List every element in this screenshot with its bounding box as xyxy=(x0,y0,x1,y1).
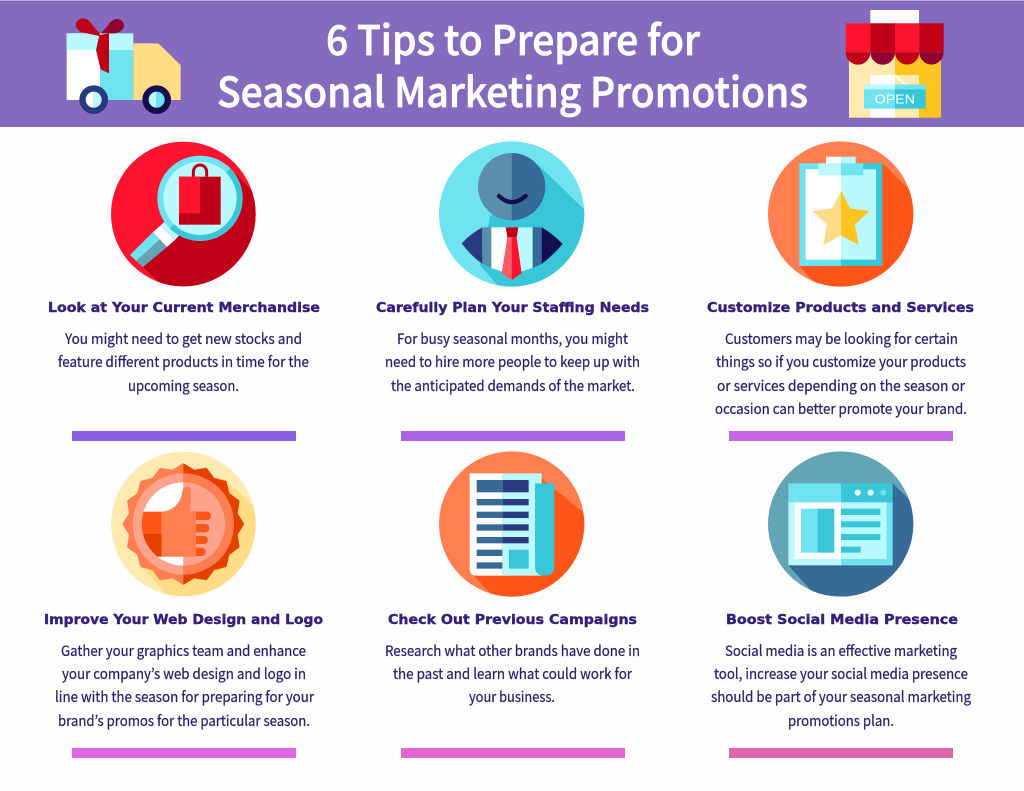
title: 6 Tips to Prepare for xyxy=(326,7,700,67)
text block: the past and learn what could work for xyxy=(393,663,632,684)
heading: Customize Products and Services xyxy=(707,300,974,316)
icon: magnifying glass over shopping bag xyxy=(111,142,263,290)
icon: clipboard with star xyxy=(768,141,917,290)
heading: Carefully Plan Your Staffing Needs xyxy=(376,300,649,316)
panel: check out previous campaigns xyxy=(385,451,640,758)
panel: improve your web design and logo xyxy=(44,452,323,758)
divider bar xyxy=(401,748,625,758)
text block xyxy=(385,328,640,396)
text block: brand’s promos for the particular season. xyxy=(58,710,310,731)
divider bar xyxy=(72,748,296,758)
text block: Gather your graphics team and enhance xyxy=(61,640,306,661)
text block: your company’s web design and logo in xyxy=(62,663,306,684)
icon: browser window xyxy=(768,451,917,600)
text block: feature different products in time for the xyxy=(58,351,309,372)
panel: customize products and services xyxy=(707,141,974,441)
text block: should be part of your seasonal marketing xyxy=(711,686,971,707)
divider bar xyxy=(729,431,953,441)
icon: newspaper xyxy=(439,451,587,600)
icon: thumbs up badge xyxy=(111,452,263,600)
text block: You might need to get new stocks and xyxy=(64,328,302,349)
icon: open store xyxy=(846,10,944,118)
text block xyxy=(711,640,971,731)
title: Seasonal Marketing Promotions xyxy=(217,59,808,119)
icon: delivery truck with gift xyxy=(67,18,181,114)
text block: need to hire more people to keep up with xyxy=(385,351,640,372)
heading: Check Out Previous Campaigns xyxy=(388,612,637,628)
text block xyxy=(715,328,967,419)
text block: things so if you customize your products xyxy=(716,351,966,372)
heading: Boost Social Media Presence xyxy=(726,612,958,628)
text block: occasion can better promote your brand. xyxy=(715,398,967,419)
panel: carefully plan your staffing needs xyxy=(376,141,649,441)
text block: promotions plan. xyxy=(788,710,894,731)
divider bar xyxy=(401,431,625,441)
text block: upcoming season. xyxy=(128,375,239,396)
text block: For busy seasonal months, you might xyxy=(397,328,628,349)
text block xyxy=(58,328,309,396)
heading: Look at Your Current Merchandise xyxy=(48,300,320,316)
text block xyxy=(55,640,314,731)
heading: Improve Your Web Design and Logo xyxy=(44,612,323,628)
text block xyxy=(385,640,640,707)
text block: Research what other brands have done in xyxy=(385,640,640,661)
text block: the anticipated demands of the market. xyxy=(391,375,635,396)
text block: or services depending on the season or xyxy=(717,375,965,396)
header banner xyxy=(0,0,1024,127)
text block: Customers may be looking for certain xyxy=(725,328,958,349)
text block: line with the season for preparing for your xyxy=(55,686,314,707)
divider bar xyxy=(72,431,296,441)
panel: look at your current merchandise xyxy=(48,142,320,441)
title xyxy=(217,7,808,119)
panel: boost social media presence xyxy=(711,451,971,758)
text block: your business. xyxy=(469,686,555,707)
icon: person in suit xyxy=(439,141,587,290)
divider bar xyxy=(729,748,953,758)
icon: open store: OPEN xyxy=(875,92,915,106)
text block: tool, increase your social media presence xyxy=(714,663,968,684)
text block: Social media is an effective marketing xyxy=(725,640,957,661)
